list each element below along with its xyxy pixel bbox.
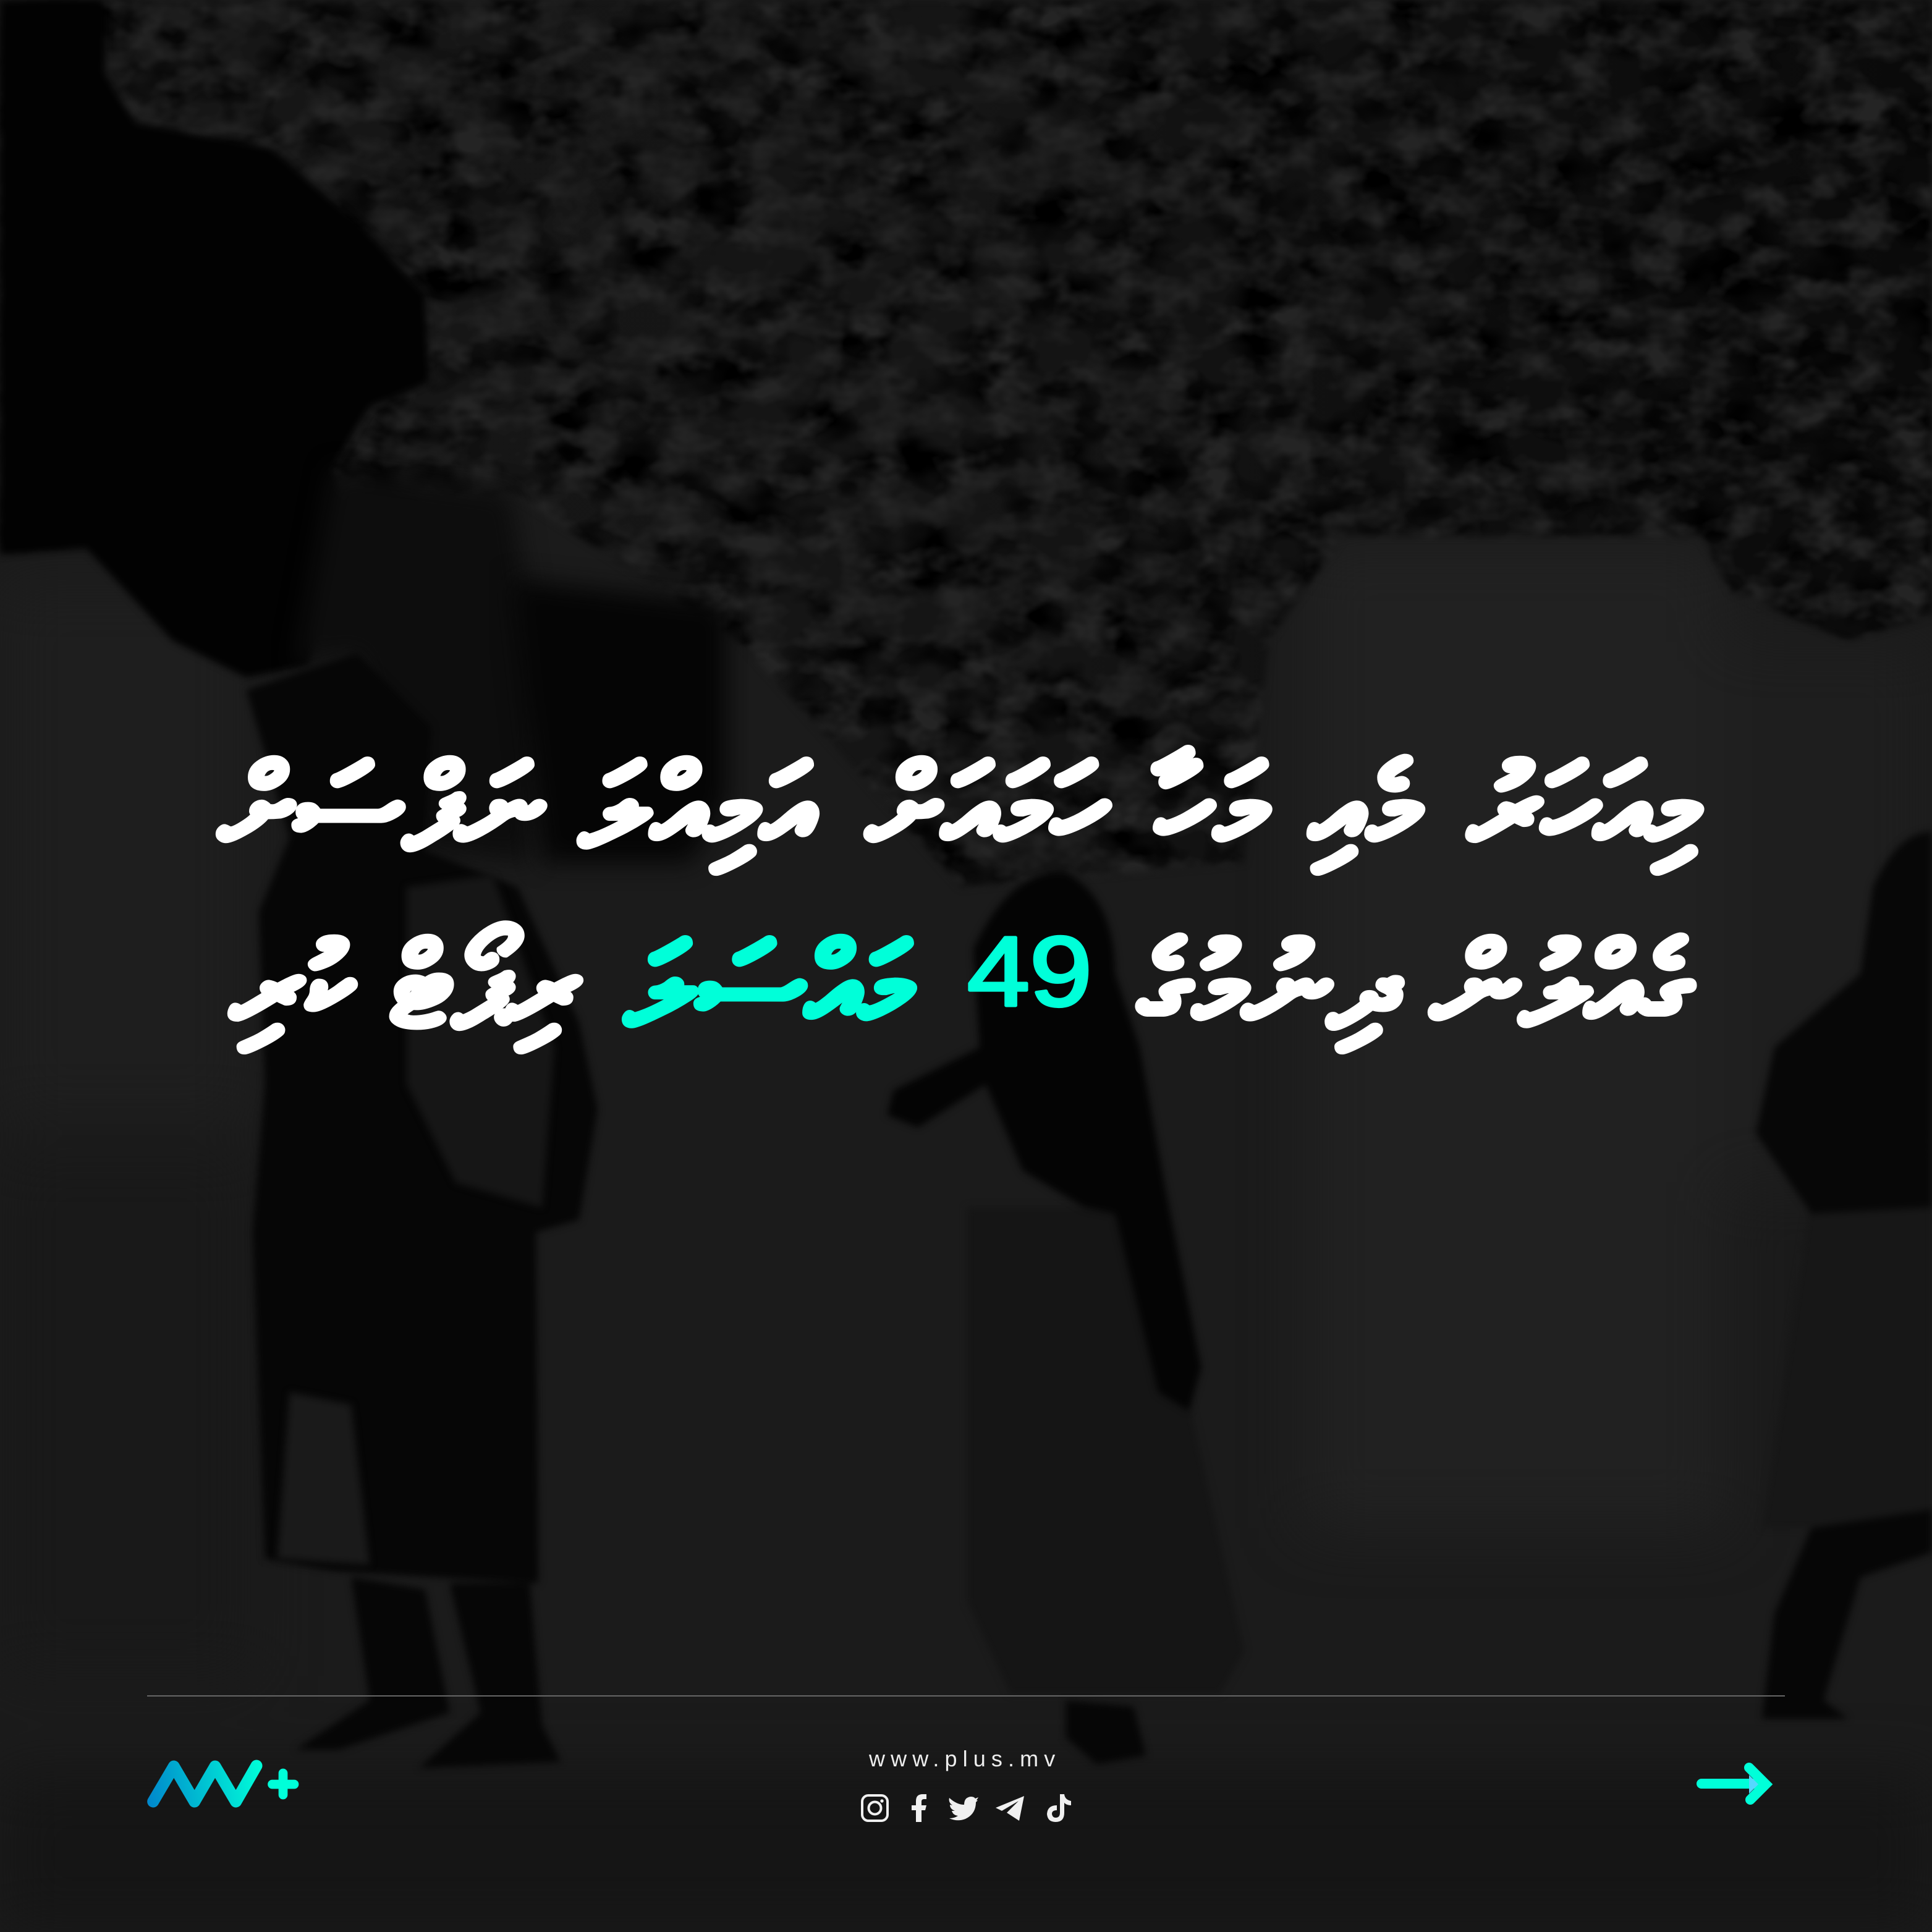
- icon: tiktok: [1047, 1794, 1071, 1822]
- icon: telegram: [996, 1796, 1024, 1821]
- headline line 1: މެއި: [1308, 743, 1424, 874]
- highlighted number 49: 49: [967, 916, 1092, 1027]
- headline line 2: highlighted word: މައްސަލަ: [623, 922, 915, 1050]
- icon: twitter: [949, 1797, 978, 1820]
- right figure: [1756, 832, 1932, 1719]
- headline line 1: މަހާ: [1152, 743, 1270, 871]
- website url: www.plus.mv: [868, 1746, 1061, 1771]
- headline line 1: ހަމައަށް: [865, 743, 1111, 871]
- headline line 2: right part: ގެއްލުން ދިނުމުގެ: [1137, 922, 1695, 1053]
- dark tree mass: [0, 0, 429, 677]
- headline line 1: އަމިއްލަ: [578, 743, 818, 874]
- left figure: [247, 653, 598, 1768]
- logo: MV+: [153, 1766, 294, 1802]
- center figure: [967, 1208, 1245, 1694]
- wall and ground tones: [0, 542, 1932, 1932]
- icon: facebook: [912, 1794, 926, 1822]
- divider line: [147, 1695, 1785, 1697]
- headline line 1: މިއަހަރު: [1467, 743, 1703, 874]
- canopy: [103, 0, 1932, 886]
- headline line 1: ނަފްސަށް: [217, 743, 546, 871]
- arrow: [1701, 1768, 1766, 1800]
- headline line 1: [217, 743, 1703, 874]
- headline line 2: left part: ރިޕޯޓް ކުރި: [229, 922, 582, 1053]
- headline: [217, 743, 1703, 1053]
- social icons: [862, 1794, 1071, 1822]
- icon: instagram: [862, 1795, 888, 1821]
